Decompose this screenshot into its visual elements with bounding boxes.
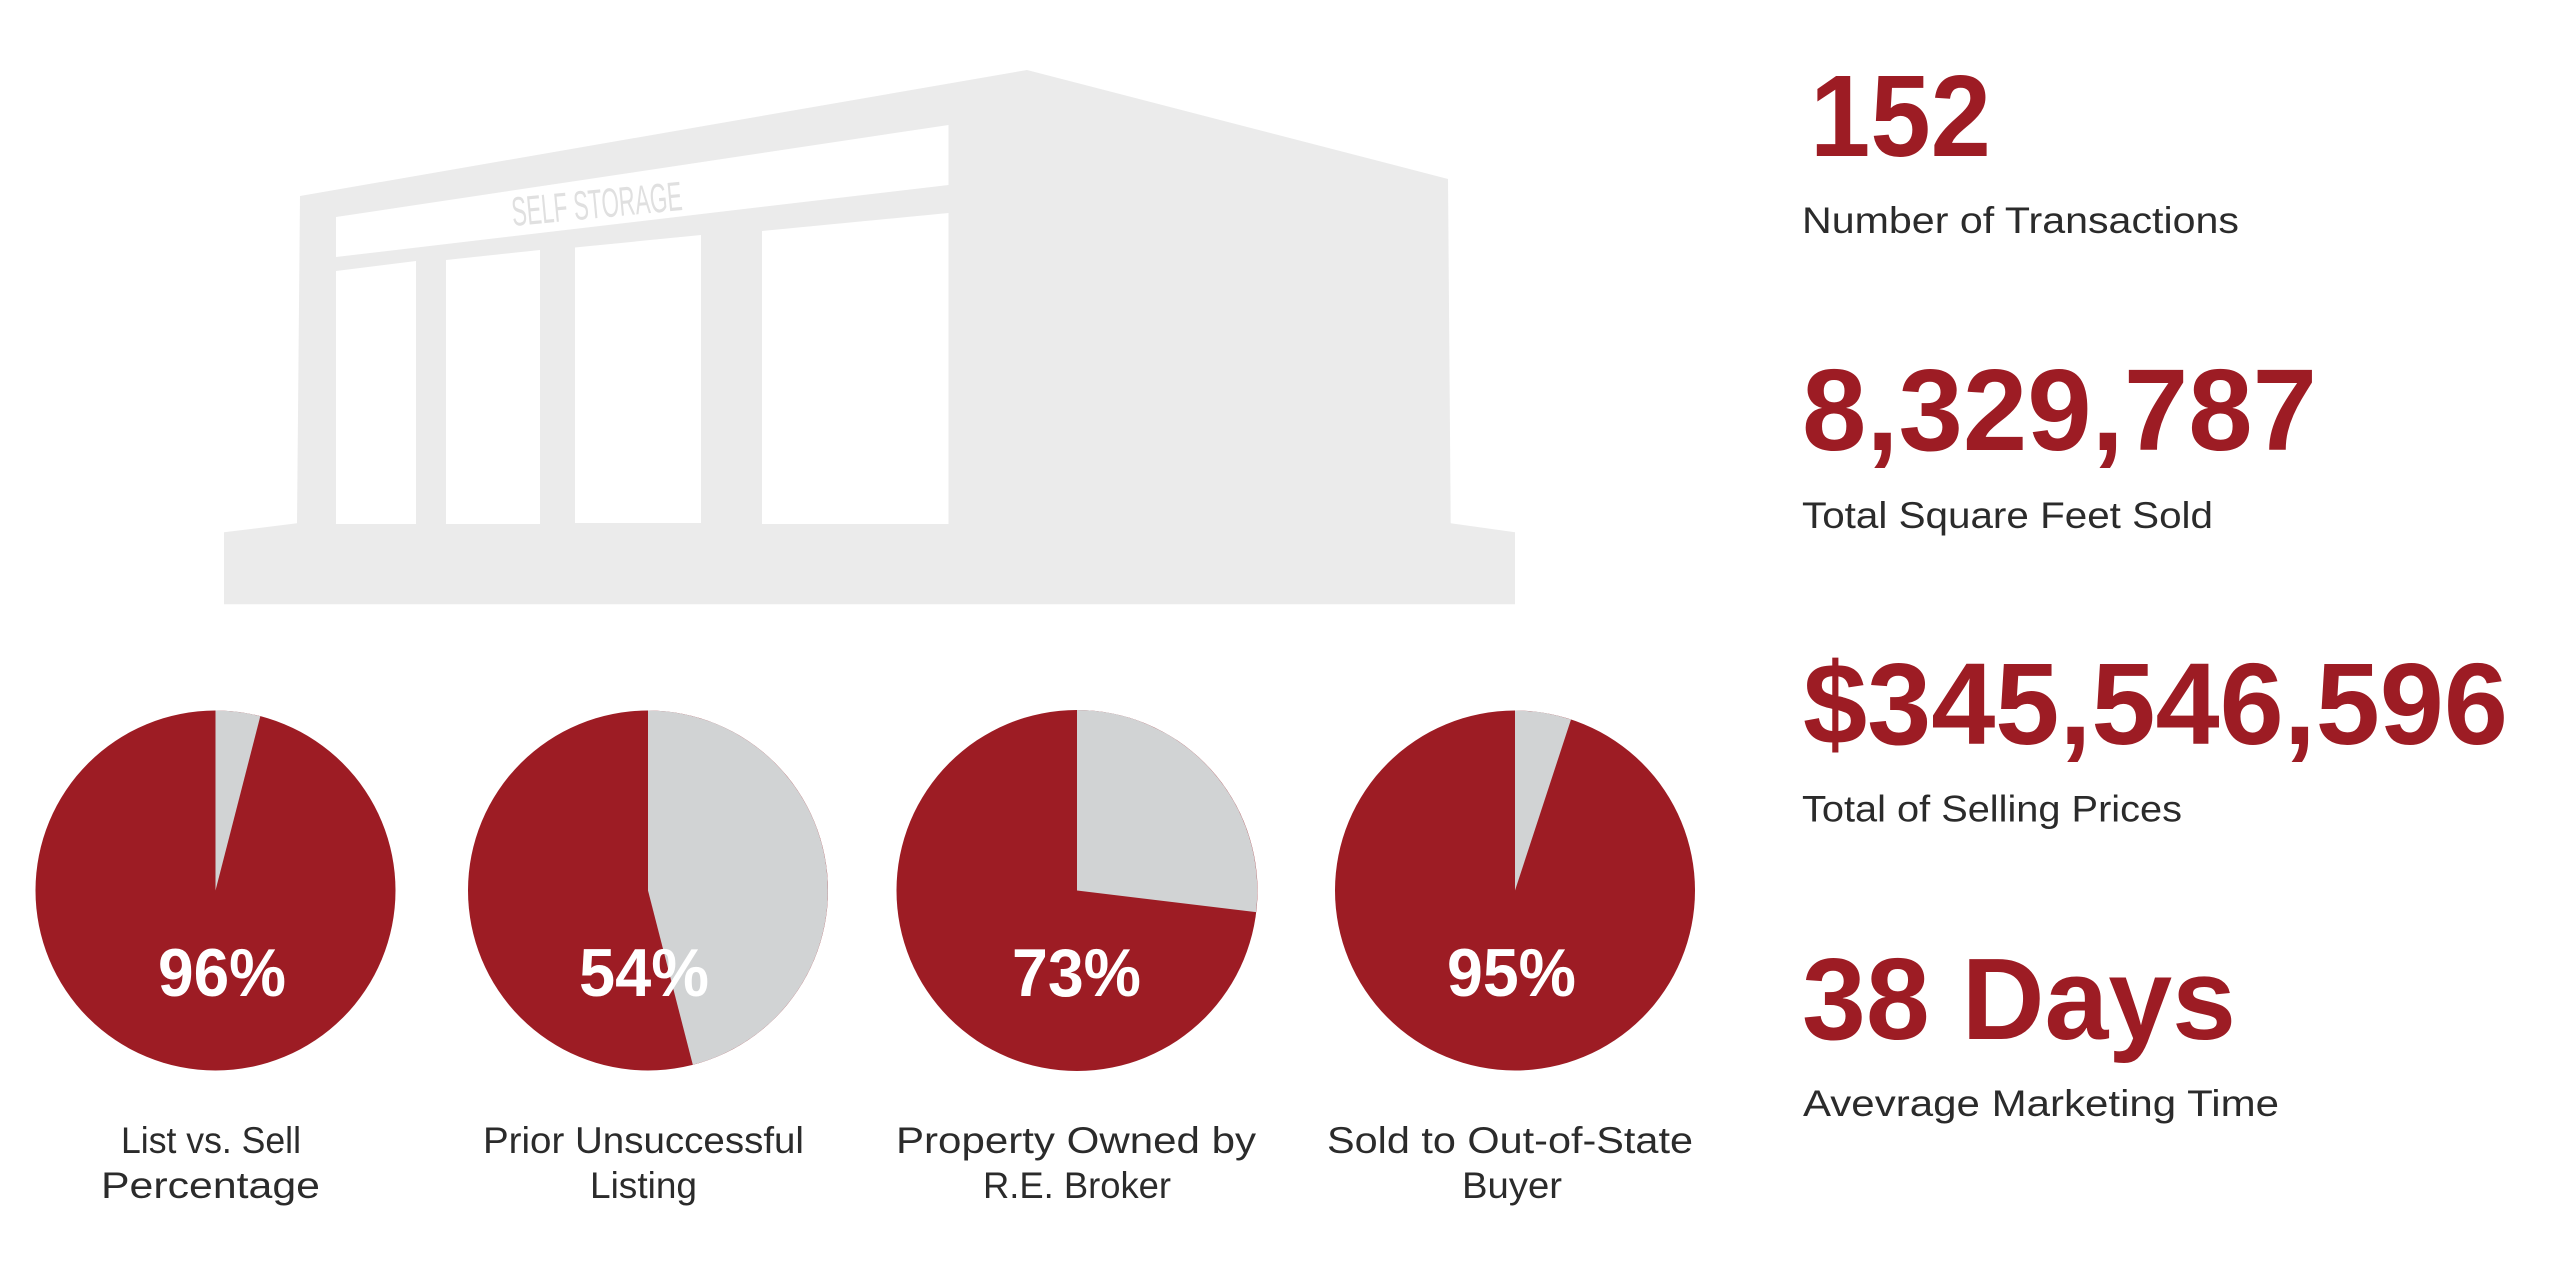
stat: total of selling prices bbox=[1802, 639, 2508, 830]
label: List vs. Sell Percentage: Percentage bbox=[101, 1165, 320, 1206]
pie chart: 96% bbox=[36, 710, 396, 1070]
panel: list vs. sell percentage bbox=[36, 710, 396, 1206]
icon: self storage building bbox=[224, 70, 1515, 604]
value: 95%: 95% bbox=[1447, 935, 1576, 1011]
pie chart: 54% bbox=[468, 710, 828, 1070]
label: Number of Transactions: Number of Transactions bbox=[1802, 200, 2239, 241]
label: Prior Unsuccessful Listing bbox=[483, 1120, 804, 1206]
label: Sold to Out-of-State Buyer: Sold to Out-of-State bbox=[1327, 1120, 1693, 1161]
stat: number of transactions bbox=[1802, 51, 2239, 241]
value: 96%: 96% bbox=[158, 935, 286, 1011]
label: Total of Selling Prices: Total of Selling Prices bbox=[1802, 788, 2182, 830]
label: Sold to Out-of-State Buyer bbox=[1327, 1120, 1693, 1206]
label: Property Owned by R.E. Broker bbox=[896, 1120, 1257, 1206]
value: 38 Days: 38 Days bbox=[1802, 934, 2236, 1064]
label: Sold to Out-of-State Buyer: Buyer bbox=[1462, 1165, 1562, 1206]
pie chart: 95% bbox=[1335, 710, 1695, 1070]
label: List vs. Sell Percentage: List vs. Sell bbox=[121, 1120, 301, 1161]
panel: sold to out-of-state buyer bbox=[1327, 710, 1695, 1206]
panel: prior unsuccessful listing bbox=[468, 710, 828, 1206]
label: Avevrage Marketing Time: Avevrage Marketing Time bbox=[1803, 1083, 2279, 1124]
panel: property owned by R.E. broker bbox=[896, 710, 1258, 1206]
label: Property Owned by R.E. Broker: R.E. Broker bbox=[983, 1165, 1171, 1206]
value: 152: 152 bbox=[1810, 51, 1991, 181]
label: Property Owned by R.E. Broker: Property Owned by bbox=[896, 1120, 1257, 1161]
value: 73%: 73% bbox=[1012, 935, 1141, 1011]
building sign text: SELF STORAGE bbox=[510, 173, 684, 235]
label: Prior Unsuccessful Listing: Prior Unsuccessful bbox=[483, 1120, 804, 1161]
stat: average marketing time bbox=[1802, 934, 2279, 1124]
stat: total square feet sold bbox=[1802, 345, 2317, 536]
pie chart: 73% bbox=[896, 710, 1258, 1071]
label: List vs. Sell Percentage bbox=[101, 1120, 320, 1206]
value: 8,329,787: 8,329,787 bbox=[1802, 345, 2317, 475]
label: Prior Unsuccessful Listing: Listing bbox=[590, 1165, 697, 1206]
value: $345,546,596: $345,546,596 bbox=[1803, 639, 2508, 769]
building silhouette bbox=[224, 70, 1515, 604]
value: 54%: 54% bbox=[579, 935, 709, 1011]
label: Total Square Feet Sold: Total Square Feet Sold bbox=[1802, 495, 2213, 536]
